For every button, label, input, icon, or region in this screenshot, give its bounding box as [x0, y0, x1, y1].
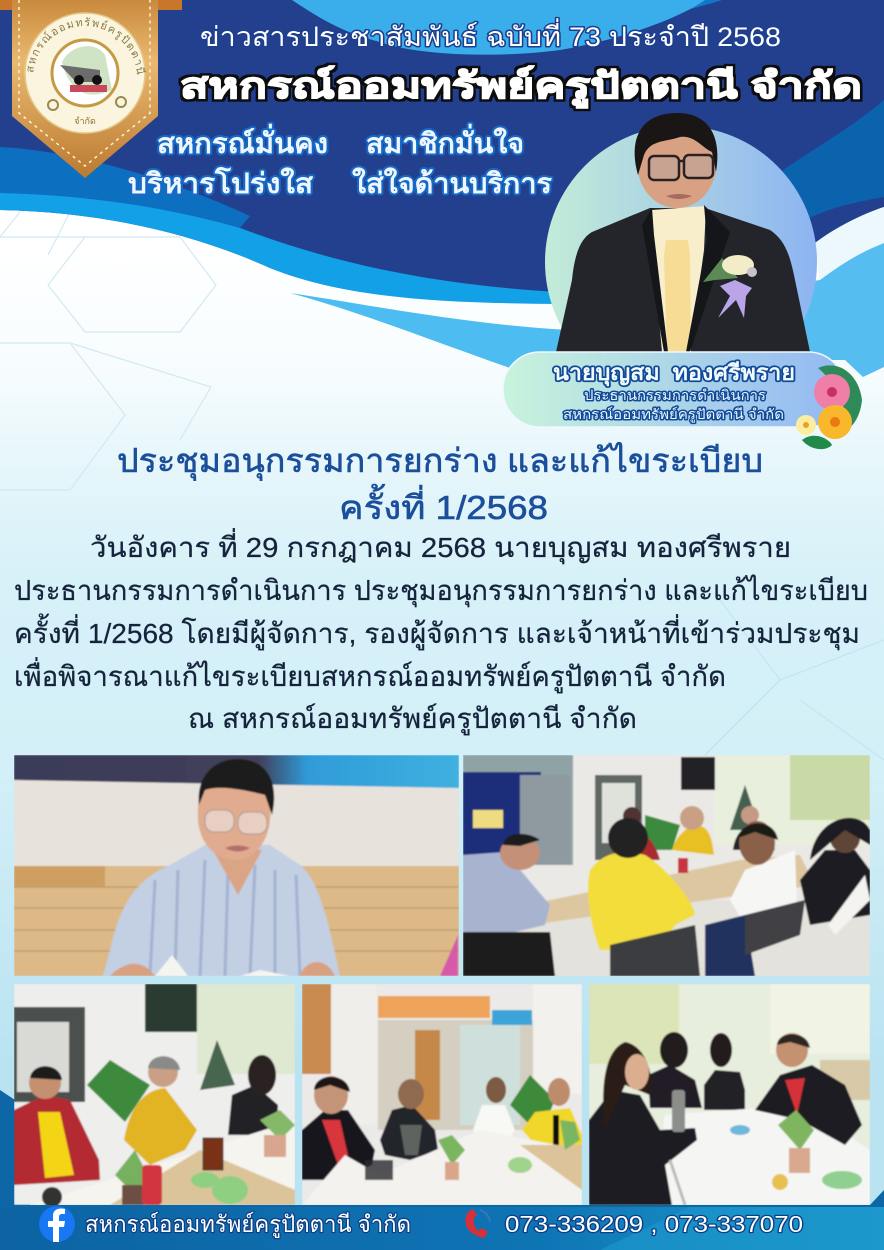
body text: ครั้งที่ 1/2568 โดยมีผู้จัดการ, รองผู้จัดการ และเจ้าหน้าที่เข้าร่วมประชุม: [14, 613, 860, 651]
body text: [14, 528, 868, 736]
newsletter line: ข่าวสารประชาสัมพันธ์ ฉบับที่ 73 ประจำปี 2568: [200, 18, 781, 52]
phone numbers: 073-336209 , 073-337070: [505, 1211, 803, 1237]
footer: phone: [465, 1209, 803, 1238]
header titles: [180, 18, 862, 109]
portrait: chairman: [545, 113, 817, 352]
slogan: ใส่ใจด้านบริการ: [352, 167, 552, 199]
icon: facebook: [39, 1206, 75, 1242]
photo: committee members left: [14, 984, 295, 1207]
icon: phone: [465, 1209, 490, 1238]
heading: [117, 442, 763, 526]
slogan: สหกรณ์มั่นคง: [157, 123, 328, 159]
icon: corsage: [703, 255, 757, 318]
badge: gold ribbon seal: จำกัด: [74, 116, 96, 126]
header waves: [0, 0, 884, 377]
badge: gold ribbon seal: [0, 0, 182, 178]
body text: วันอังคาร ที่ 29 กรกฎาคม 2568 นายบุญสม ทองศรีพราย: [90, 528, 791, 565]
footer background: [0, 1090, 884, 1250]
slogan: สมาชิกมั่นใจ: [366, 123, 524, 159]
chairman name: นายบุญสม ทองศรีพราย: [553, 360, 795, 387]
photo: chairman at desk: [14, 755, 459, 976]
heading: ครั้งที่ 1/2568: [339, 484, 548, 526]
chairman organisation: สหกรณ์ออมทรัพย์ครูปัตตานี จำกัด: [563, 406, 784, 423]
heading: ประชุมอนุกรรมการยกร่าง และแก้ไขระเบียบ: [117, 442, 763, 481]
cooperative name: สหกรณ์ออมทรัพย์ครูปัตตานี จำกัด: [180, 65, 862, 109]
body text: เพื่อพิจารณาแก้ไขระเบียบสหกรณ์ออมทรัพย์ครูปัตตานี จำกัด: [14, 657, 726, 694]
photo: committee members right: [589, 984, 870, 1205]
slogan: บริหารโปร่งใส: [128, 166, 314, 199]
body text: ประธานกรรมการดำเนินการ ประชุมอนุกรรมการยกร่าง และแก้ไขระเบียบ: [14, 575, 868, 608]
facebook page name: สหกรณ์ออมทรัพย์ครูปัตตานี จำกัด: [85, 1211, 411, 1238]
footer: facebook: [39, 1206, 411, 1242]
photo: meeting table wide: [463, 755, 870, 976]
body text: ณ สหกรณ์ออมทรัพย์ครูปัตตานี จำกัด: [188, 703, 637, 736]
slogan: [128, 123, 552, 199]
badge: gold ribbon seal: สหกรณ์ออมทรัพย์ครูปัตตานี: [28, 17, 146, 74]
name plate: [503, 352, 845, 427]
photo: committee members centre: [302, 984, 582, 1205]
icon: tropical flowers: [796, 365, 862, 449]
chairman role: ประธานกรรมการดำเนินการ: [584, 387, 767, 403]
